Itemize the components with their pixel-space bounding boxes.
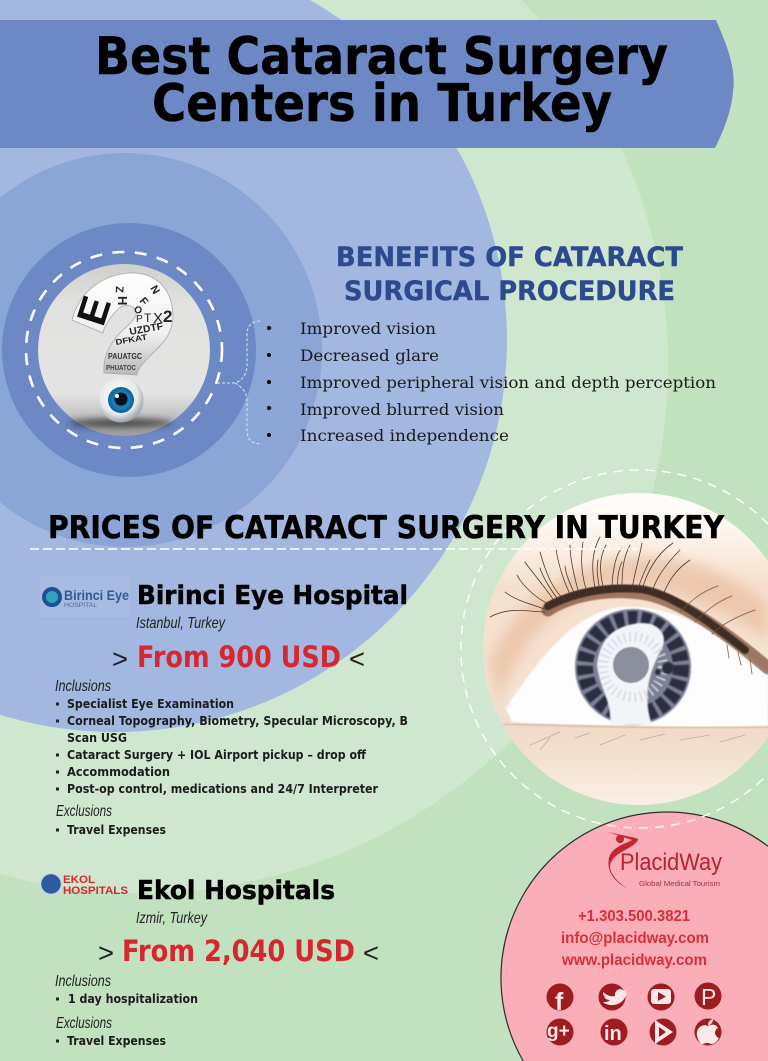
contact details: info@placidway.com bbox=[561, 930, 709, 947]
question mark emblem bbox=[2, 223, 256, 477]
title banner bbox=[0, 20, 734, 148]
icon: question mark made of chart letters: T bbox=[144, 311, 152, 325]
benefits list: Decreased glare bbox=[300, 346, 439, 365]
contact details: www.placidway.com bbox=[561, 952, 707, 969]
exclusions: Travel Expenses bbox=[67, 1033, 166, 1048]
hospital name: Ekol Hospitals bbox=[137, 876, 335, 906]
icon: question mark made of chart letters: UZDTF bbox=[129, 321, 164, 338]
benefits list: Improved vision bbox=[300, 319, 436, 338]
icon: question mark made of chart letters: PHUATOC bbox=[106, 365, 136, 372]
benefits heading: SURGICAL PROCEDURE bbox=[344, 276, 675, 307]
title line 1: Best Cataract Surgery bbox=[95, 27, 668, 87]
icon: facebook bbox=[546, 984, 574, 1016]
logo: Birinci Eye bbox=[39, 575, 131, 618]
icon: eyeball with shadow bbox=[69, 378, 173, 428]
icon: question mark made of chart letters: F bbox=[137, 295, 150, 308]
icon: question mark made of chart letters: P bbox=[136, 314, 143, 325]
exclusions bbox=[56, 803, 166, 837]
icon: linkedin bbox=[600, 1018, 628, 1046]
icon: twitter bbox=[598, 984, 627, 1010]
sclera bbox=[506, 607, 768, 727]
contact details bbox=[561, 908, 709, 969]
icon: question mark made of chart letters: O bbox=[131, 304, 144, 317]
inclusions bbox=[55, 973, 198, 1006]
decorative dashed ring around eye bbox=[461, 470, 768, 828]
benefits list: Improved peripheral vision and depth perception bbox=[300, 373, 716, 392]
eye photograph bbox=[480, 490, 768, 810]
price: < bbox=[349, 644, 365, 674]
logo: Ekol Hospitals: HOSPITALS bbox=[63, 885, 128, 897]
inclusions: 1 day hospitalization bbox=[68, 991, 198, 1006]
title line 2: Centers in Turkey bbox=[152, 74, 612, 134]
hospital listing: Ekol Hospitals bbox=[40, 874, 379, 1048]
price: From 900 USD bbox=[137, 640, 341, 674]
inclusions: Scan USG bbox=[67, 730, 127, 745]
icon: question mark made of chart letters: E bbox=[68, 291, 120, 331]
icon: google plus bbox=[546, 1018, 574, 1046]
benefits heading bbox=[336, 242, 684, 307]
logo: Ekol Hospitals bbox=[40, 874, 128, 897]
exclusions: Travel Expenses bbox=[67, 822, 166, 837]
icon: pinterest bbox=[694, 982, 722, 1010]
eyelashes bbox=[490, 537, 768, 674]
eyelid crease bbox=[490, 556, 768, 705]
icon: question mark made of chart letters: Z bbox=[113, 286, 125, 293]
icon: apple bbox=[694, 1018, 722, 1046]
bracket connector bbox=[217, 321, 262, 444]
inclusions: Accommodation bbox=[67, 764, 170, 779]
icon: question mark made of chart letters: 2 bbox=[163, 307, 172, 326]
contact details: +1.303.500.3821 bbox=[578, 908, 690, 925]
icon: question mark made of chart letters: N bbox=[147, 284, 162, 296]
pupil bbox=[613, 647, 649, 683]
dashed ring bbox=[26, 252, 222, 448]
exclusions: Exclusions bbox=[56, 1015, 112, 1032]
benefits list: Improved blurred vision bbox=[300, 400, 504, 419]
icon: question mark made of chart letters: DFKAT bbox=[115, 333, 148, 347]
benefits heading: BENEFITS OF CATARACT bbox=[336, 242, 684, 273]
inclusions: Corneal Topography, Biometry, Specular Microscopy, B bbox=[67, 713, 408, 728]
icon: play store bbox=[650, 1018, 676, 1046]
logo: Birinci Eye: Birinci Eye bbox=[64, 587, 129, 603]
price: From 2,040 USD bbox=[122, 934, 355, 968]
icon: question mark made of chart letters bbox=[68, 273, 173, 375]
inclusions: Inclusions bbox=[55, 678, 111, 695]
contact panel bbox=[501, 812, 768, 1061]
inclusions: Cataract Surgery + IOL Airport pickup – drop off bbox=[67, 747, 367, 762]
logo: Birinci Eye: HOSPITAL bbox=[64, 602, 97, 609]
iris bbox=[575, 609, 691, 725]
icon: question mark made of chart letters: H bbox=[115, 296, 130, 305]
social icons bbox=[546, 982, 722, 1046]
benefits list: Increased independence bbox=[300, 426, 509, 445]
icon: question mark made of chart letters: PAUATGC bbox=[108, 352, 142, 361]
logo: Ekol Hospitals: EKOL bbox=[63, 874, 95, 886]
inclusions bbox=[55, 678, 408, 796]
location: Izmir, Turkey bbox=[136, 910, 208, 927]
illustration disc bbox=[38, 264, 210, 436]
exclusions bbox=[56, 1015, 166, 1048]
PlacidWay logo: Global Medical Tourism bbox=[639, 879, 720, 888]
icon: facebook: f bbox=[555, 988, 564, 1016]
price: > bbox=[98, 938, 114, 968]
PlacidWay logo bbox=[608, 832, 722, 889]
icon: question mark made of chart letters: X bbox=[153, 310, 163, 327]
inclusions: Specialist Eye Examination bbox=[67, 696, 234, 711]
hospital name: Birinci Eye Hospital bbox=[137, 581, 408, 611]
price: < bbox=[363, 938, 379, 968]
exclusions: Exclusions bbox=[56, 803, 112, 820]
location: Istanbul, Turkey bbox=[136, 615, 226, 632]
icon: google plus: g+ bbox=[547, 1021, 570, 1042]
icon: youtube bbox=[648, 984, 674, 1010]
icon: pinterest: P bbox=[701, 984, 716, 1010]
hospital listing: Birinci Eye Hospital bbox=[39, 575, 408, 837]
lower lid bbox=[503, 724, 768, 728]
inclusions: Post-op control, medications and 24/7 Interpreter bbox=[67, 781, 379, 796]
inclusions: Inclusions bbox=[55, 973, 111, 990]
PlacidWay logo: PlacidWay bbox=[620, 849, 722, 876]
benefits list bbox=[267, 319, 716, 445]
price: > bbox=[112, 644, 128, 674]
icon: linkedin: in bbox=[604, 1023, 622, 1045]
